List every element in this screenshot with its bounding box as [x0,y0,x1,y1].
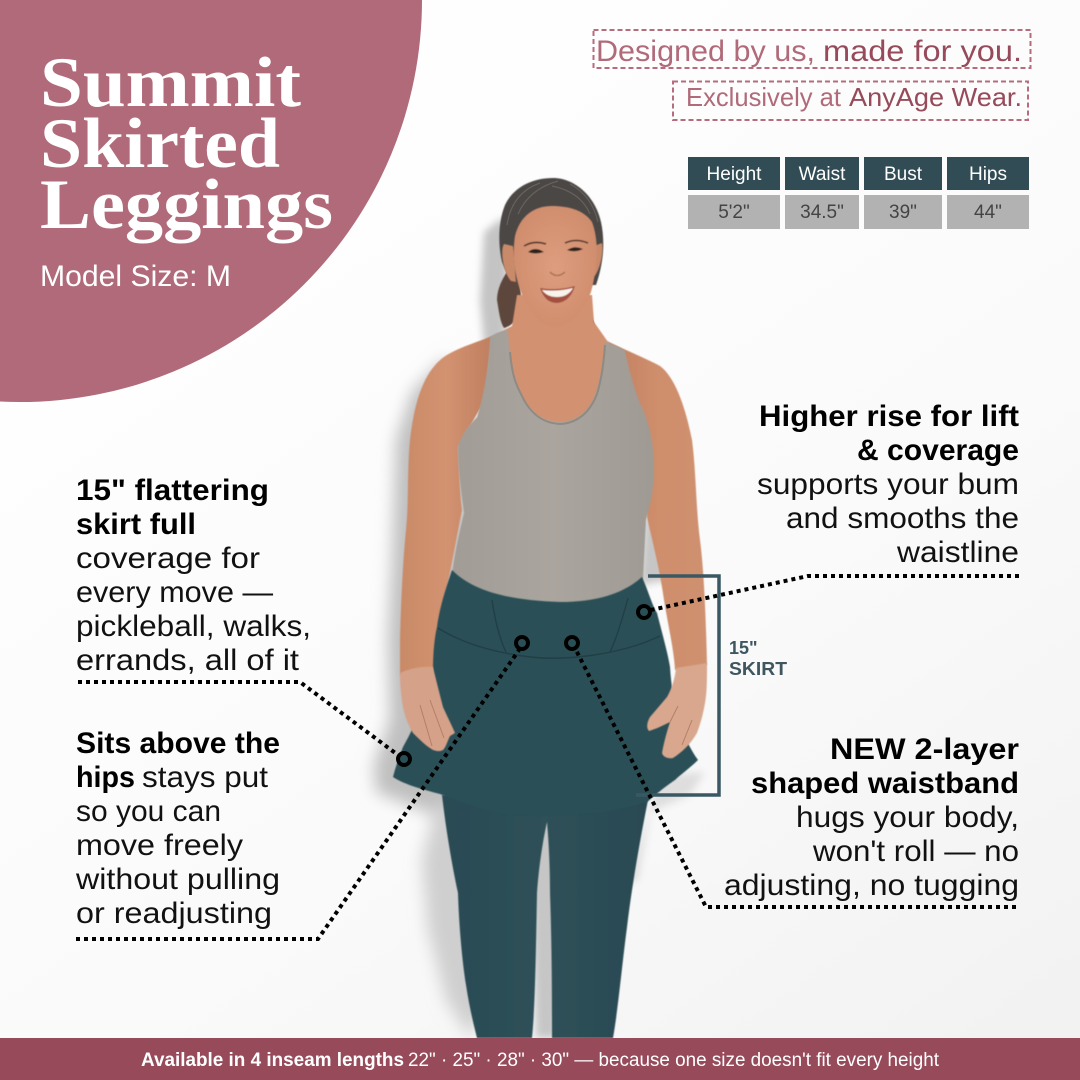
callout: 15 inch skirt: coverage for [76,542,260,575]
callout: 15 inch skirt: errands, all of it [76,644,300,677]
callout: new waistband: hugs your body, [796,801,1019,834]
footer banner: Available in 4 inseam lengths [141,1050,404,1071]
callout: new waistband [724,733,1019,902]
eyes [528,247,583,254]
left hand [400,667,455,751]
left arm [400,336,492,675]
title badge [0,0,422,402]
callout: sits above hips [75,727,280,930]
title [40,44,333,244]
callout: higher rise [757,400,1019,569]
tank top [452,330,654,610]
face [514,206,597,327]
waistband seam [438,598,660,658]
leader line: higher rise [638,576,1019,618]
callout: new waistband: won't roll — no [812,835,1019,868]
column: waist: 34.5" [800,202,844,223]
title: Skirted [40,105,280,183]
callout: sits above hips: move freely [76,829,243,862]
callout: 15 inch skirt: pickleball, walks, [76,610,311,643]
hair highlights [507,181,598,225]
column: hips: Hips [969,164,1007,185]
teeth [542,288,573,297]
callout: new waistband: NEW 2-layer [830,733,1019,766]
left hand fingers [420,700,444,746]
callout: sits above hips: or readjusting [76,897,272,930]
title: Summit [40,44,301,122]
column: hips: 44" [974,202,1002,223]
footer banner [0,1038,1080,1080]
tagline: designed by us [594,30,1030,68]
callout: 15 inch skirt [76,474,311,677]
loose curl right [589,300,594,327]
callout: higher rise: supports your bum [757,468,1019,501]
callout: higher rise: waistline [896,536,1019,569]
callout: sits above hips: so you can [76,795,221,828]
tagline: exclusively: AnyAge Wear. [849,82,1022,112]
leggings [442,795,648,1038]
head [502,206,603,327]
callout: new waistband: shaped waistband [751,767,1019,800]
skirt length bracket: 15" [729,638,758,658]
smile [540,286,575,303]
cast shadow behind model [374,218,705,1038]
tagline: exclusively [673,82,1028,120]
model size: Model Size: M [40,260,231,293]
column: bust: 39" [889,202,917,223]
tagline: designed by us: Designed by us, [596,35,815,68]
skirt [393,570,698,816]
right hand [647,663,707,758]
callout: 15 inch skirt: every move — [76,576,273,609]
model photo illustration [374,178,707,1038]
nose [550,272,565,276]
ears [502,243,603,282]
column: height: Height [707,164,762,185]
callout: sits above hips: Sits above the [76,727,280,760]
callout: 15 inch skirt: skirt full [76,508,196,541]
model measurements table [688,157,1029,229]
skirt length bracket [636,576,787,795]
callout: higher rise: Higher rise for lift [759,400,1019,433]
leader line: skirt [78,682,410,765]
eyebrows [524,240,588,246]
column: hips [947,157,1029,229]
leader line: hips [76,637,528,939]
skirt length bracket: SKIRT [729,659,787,679]
callout: sits above hips: hips [76,761,135,794]
back hair [499,178,603,285]
leader line: waistband [566,637,1016,907]
callout: new waistband: adjusting, no tugging [724,869,1019,902]
column: bust: Bust [884,164,923,185]
callout: higher rise: and smooths the [786,502,1019,535]
column: height: 5'2" [718,202,750,223]
callout: 15 inch skirt: 15" flattering [76,474,269,507]
quarter circle [0,0,422,402]
callout: sits above hips: without pulling [75,863,280,896]
footer banner: 22" · 25" · 28" · 30" — because one size doesn't fit every height [408,1050,940,1071]
tagline: exclusively: Exclusively at [686,82,842,112]
column: waist: Waist [799,164,846,185]
title: Leggings [40,166,333,244]
column: bust [864,157,942,229]
right arm [607,341,707,670]
ponytail curls [497,272,522,328]
tagline: designed by us: made for you. [823,35,1022,68]
right hand fingers [670,706,692,745]
neck and chest skin [490,295,608,425]
tank neckline trim [510,345,605,424]
column: height [688,157,780,229]
column: waist [785,157,859,229]
callout: higher rise: & coverage [857,434,1019,467]
callout: sits above hips: stays put [142,761,269,794]
